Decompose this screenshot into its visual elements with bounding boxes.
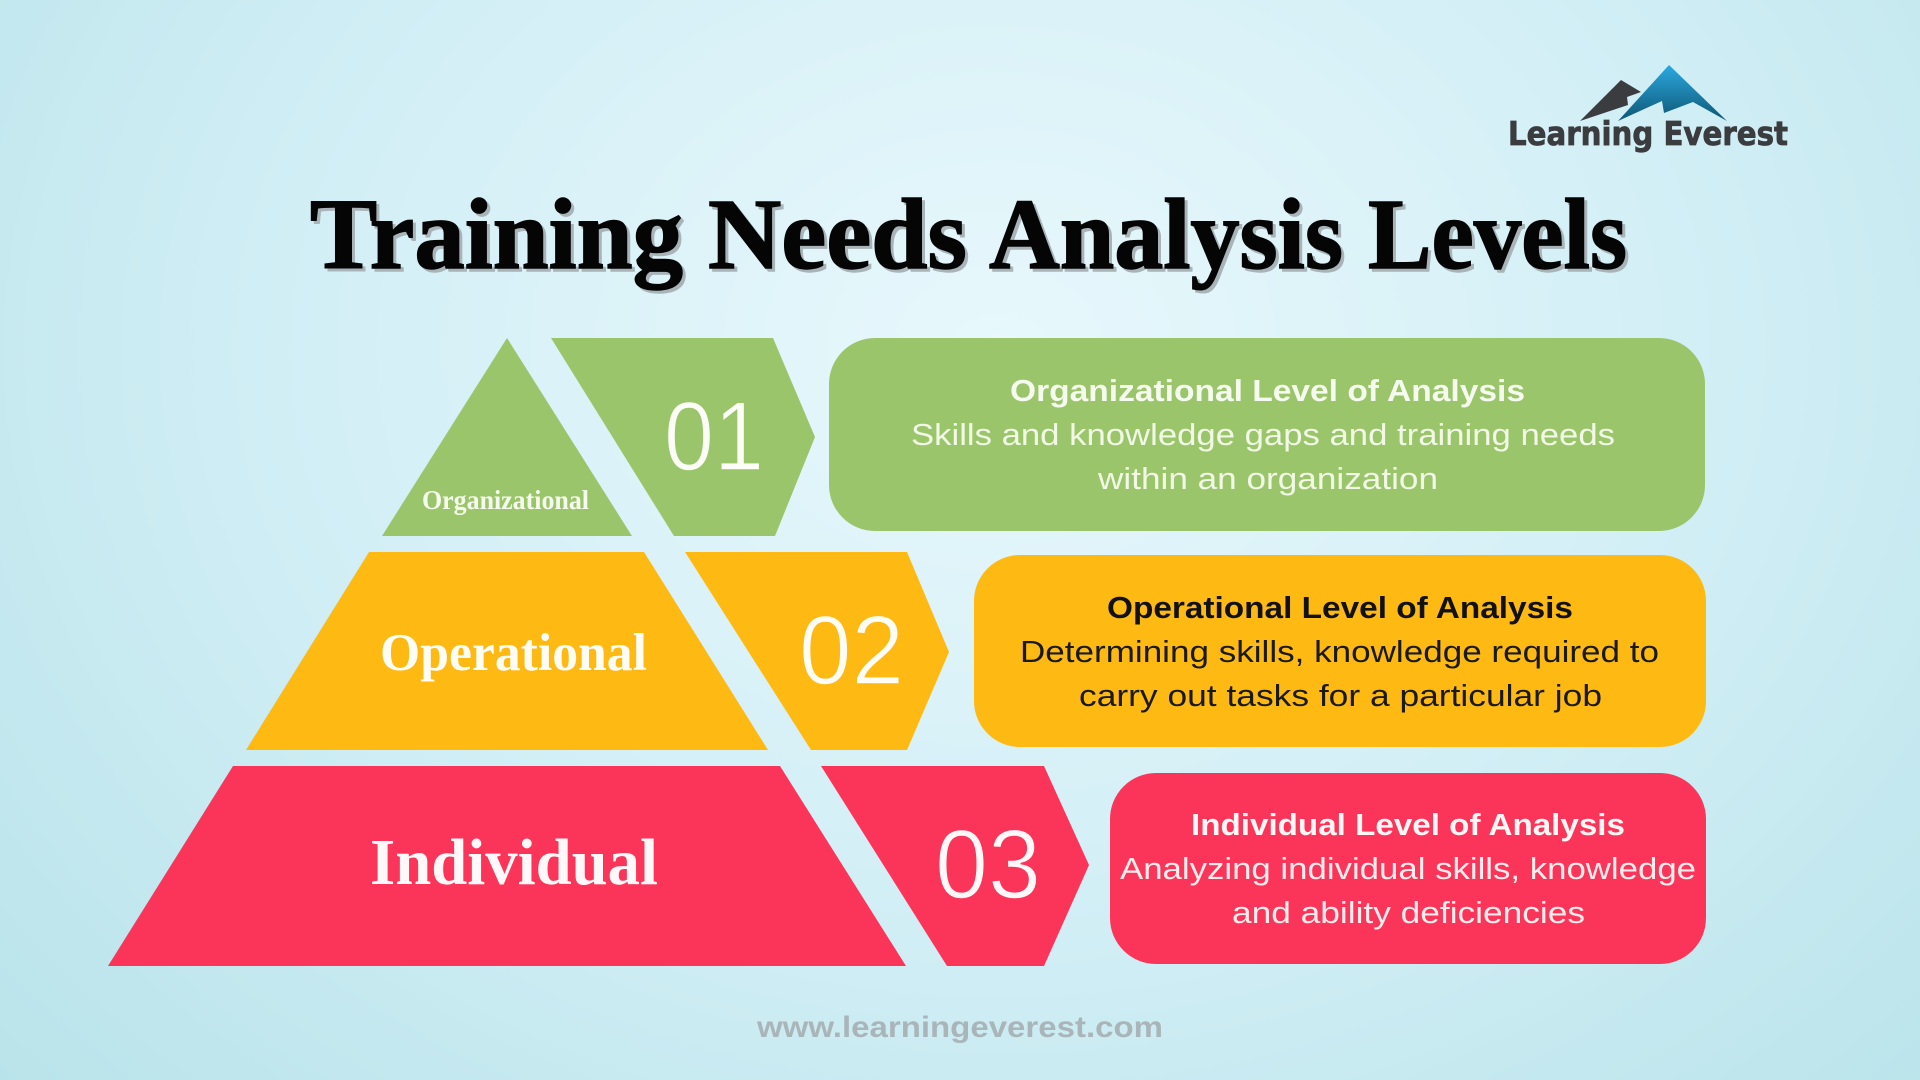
- tier label: Operational: [380, 624, 647, 682]
- panel: individual description: [1110, 773, 1706, 964]
- number: 03: [935, 809, 1041, 919]
- number: 01: [664, 381, 764, 491]
- panel body: carry out tasks for a particular job: [1079, 678, 1602, 713]
- title: [310, 178, 1630, 293]
- number: 02: [799, 595, 904, 705]
- number arrow 02: [685, 552, 949, 750]
- tier label: Organizational: [422, 485, 589, 515]
- number arrow 03: [821, 766, 1089, 966]
- panel heading: Operational Level of Analysis: [1107, 590, 1573, 625]
- title shadow: [313, 181, 1630, 293]
- panel body: [911, 417, 1615, 496]
- title shadow: Needs: [711, 181, 970, 293]
- tier label: Individual: [370, 826, 658, 899]
- title words: Analysis: [989, 178, 1343, 290]
- title words: Levels: [1368, 178, 1627, 290]
- title shadow: Levels: [1371, 181, 1630, 293]
- panel body: Analyzing individual skills, knowledge: [1120, 851, 1696, 886]
- title words: Training: [310, 178, 683, 290]
- panel body: Skills and knowledge gaps and training needs: [911, 417, 1615, 452]
- panel: organizational description: [829, 338, 1705, 531]
- panel: operational description: [974, 555, 1706, 747]
- icon: blue mountain: [1618, 65, 1727, 121]
- logo: Learning Everest: [1508, 65, 1788, 153]
- panel heading: Individual Level of Analysis: [1191, 807, 1625, 842]
- title words: Needs: [708, 178, 967, 290]
- panel body: and ability deficiencies: [1232, 895, 1585, 930]
- title shadow: Analysis: [992, 181, 1346, 293]
- pyramid tier: Operational: [246, 552, 768, 750]
- footer website url: www.learningeverest.com: [756, 1011, 1163, 1044]
- panel heading: Organizational Level of Analysis: [1010, 373, 1525, 408]
- title shadow: Training: [313, 181, 686, 293]
- panel body: within an organization: [1097, 461, 1438, 496]
- number arrow 01: [551, 338, 815, 536]
- logo wordmark: Learning Everest: [1508, 114, 1788, 153]
- panel body: [1120, 851, 1696, 930]
- icon: dark mountain: [1580, 80, 1641, 121]
- pyramid tier: Organizational: [382, 338, 632, 536]
- panel body: [1020, 634, 1659, 713]
- title words: [310, 178, 1627, 290]
- panel body: Determining skills, knowledge required to: [1020, 634, 1659, 669]
- pyramid tier: Individual: [108, 766, 906, 966]
